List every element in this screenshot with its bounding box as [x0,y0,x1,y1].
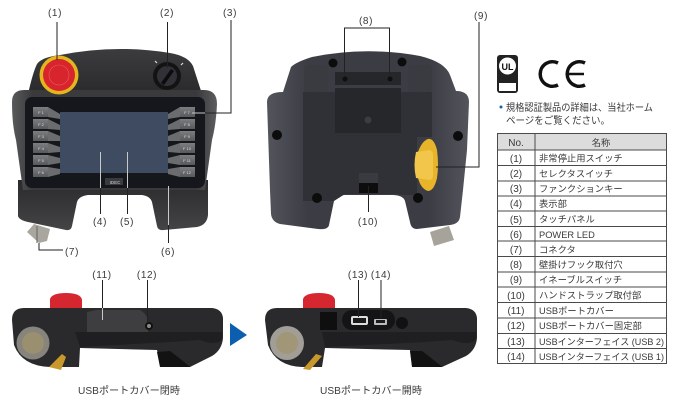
caption: cover closed: USBポートカバー閉時 [78,385,180,397]
part labels: (2) [160,8,174,19]
closed device body [12,308,223,367]
part labels: (13) [348,270,368,281]
parts table: ハンドストラップ取付部 [539,290,641,300]
part labels: (10) [358,217,378,228]
parts table: USBポートカバー固定部 [539,321,642,331]
parts table [497,133,667,364]
USB port cover [87,310,148,332]
part labels [48,8,488,281]
lower housing with hand notch [18,180,208,230]
function keys F7 to F12: F 9 [184,134,191,139]
part labels: (12) [137,270,157,281]
parts table: POWER LED [539,230,595,240]
front lip band [75,332,222,347]
centre recess [303,92,432,201]
panel: USB cover closed [12,293,223,370]
cover screw [145,322,153,330]
round connector [270,326,304,360]
parts table: USBインターフェイス (USB 1) [539,352,664,362]
yellow enable tab [303,354,322,370]
function keys F1 to F6: F 1 [38,110,45,115]
parts table: (4) [510,199,522,210]
display and touch panel [60,112,168,173]
parts table: 名称 [592,137,610,148]
panel: back view of device [267,51,469,246]
USB port recess [342,310,395,330]
red button top [50,293,82,308]
screw hole [396,317,408,329]
part labels: (6) [161,247,175,258]
parts table: (13) [507,337,525,348]
top grips [304,65,432,92]
parts table: (1) [510,154,522,165]
open device body [265,308,477,367]
certification note: ページをご覧ください。 [506,114,610,127]
part labels: (3) [223,8,237,19]
front lip band [322,332,476,347]
connector [27,224,50,243]
brand plate [105,178,123,185]
certification note: 規格認証製品の詳細は、当社ホーム [506,101,653,114]
black front panel [25,97,205,188]
function keys F7 to F12: F 10 [183,146,192,151]
panel: front view of device [12,49,217,243]
parts table: ファンクションキー [539,184,623,194]
parts table: (11) [507,306,525,317]
top housing [28,49,202,94]
function keys F7 to F12: F 11 [183,158,192,163]
right foot [410,351,442,367]
back housing [267,51,469,229]
part labels: (8) [359,16,373,27]
right foot [157,351,190,367]
parts table: 壁掛けフック取付穴 [539,259,623,270]
caption: cover open: USBポートカバー開時 [320,385,422,397]
USB 1 port [374,319,387,325]
parts table: (7) [510,245,522,256]
wall hook holes [342,76,392,82]
function keys F1 to F6: F 4 [38,146,45,151]
parts table: 非常停止用スイッチ [539,152,623,164]
parts table: セレクタスイッチ [539,169,613,179]
round connector [16,326,50,360]
function keys F7 to F12: F 8 [184,122,191,127]
function keys F1 to F6: F 3 [38,134,45,139]
screws and rubber feet [272,58,463,203]
parts table: (6) [510,230,522,241]
parts table: (8) [510,260,522,271]
table header [497,133,667,150]
arrow between states [230,323,247,346]
icon: CE mark [540,62,585,86]
part labels: (7) [65,247,79,258]
part labels: (4) [93,217,107,228]
selector switch [153,61,183,90]
part labels: (9) [474,11,488,22]
parts table: (5) [510,215,522,226]
icon: UL certified mark [497,55,518,93]
parts table: (14) [507,352,525,363]
parts table: (2) [510,169,522,180]
parts table: コネクタ [539,245,576,255]
certification note [500,101,653,127]
USB 2 port [351,316,368,325]
wall hook plate [335,72,401,133]
parts table: タッチパネル [539,214,595,224]
part labels: (5) [120,217,134,228]
centre screw [364,116,372,124]
side grips [12,90,217,190]
function keys F7 to F12: F 12 [183,170,192,175]
cover hinge [320,312,337,330]
parts table: USBポートカバー [539,306,614,316]
part labels: (1) [48,8,62,19]
brand plate: IDEC [110,180,121,185]
function keys F1 to F6 [33,107,60,177]
parts table: (10) [507,291,525,302]
icon: UL certified mark: UL [502,62,514,72]
parts table: 表示部 [539,199,567,209]
part labels: (14) [371,270,391,281]
red button top [303,293,335,308]
part labels: (11) [92,270,112,281]
function keys F1 to F6: F 2 [38,122,45,127]
function keys F1 to F6: F 6 [38,170,45,175]
connector [430,226,454,246]
parts table: No. [508,138,524,149]
parts table: USBインターフェイス (USB 2) [539,337,664,347]
enable switch [414,139,438,191]
function keys F7 to F12 [168,107,195,177]
emergency stop button [40,56,78,94]
leader lines [39,20,479,322]
parts table: イネーブルスイッチ [539,274,622,285]
parts table: (9) [510,275,522,286]
panel: USB cover open [265,293,477,370]
hand strap mount [359,173,378,193]
parts table: (3) [510,184,522,195]
function keys F1 to F6: F 5 [38,158,45,163]
parts table: (12) [507,321,525,332]
light leader segments over dark housing [100,113,205,320]
yellow enable tab [49,354,66,370]
function keys F7 to F12: F 7 [184,110,191,115]
